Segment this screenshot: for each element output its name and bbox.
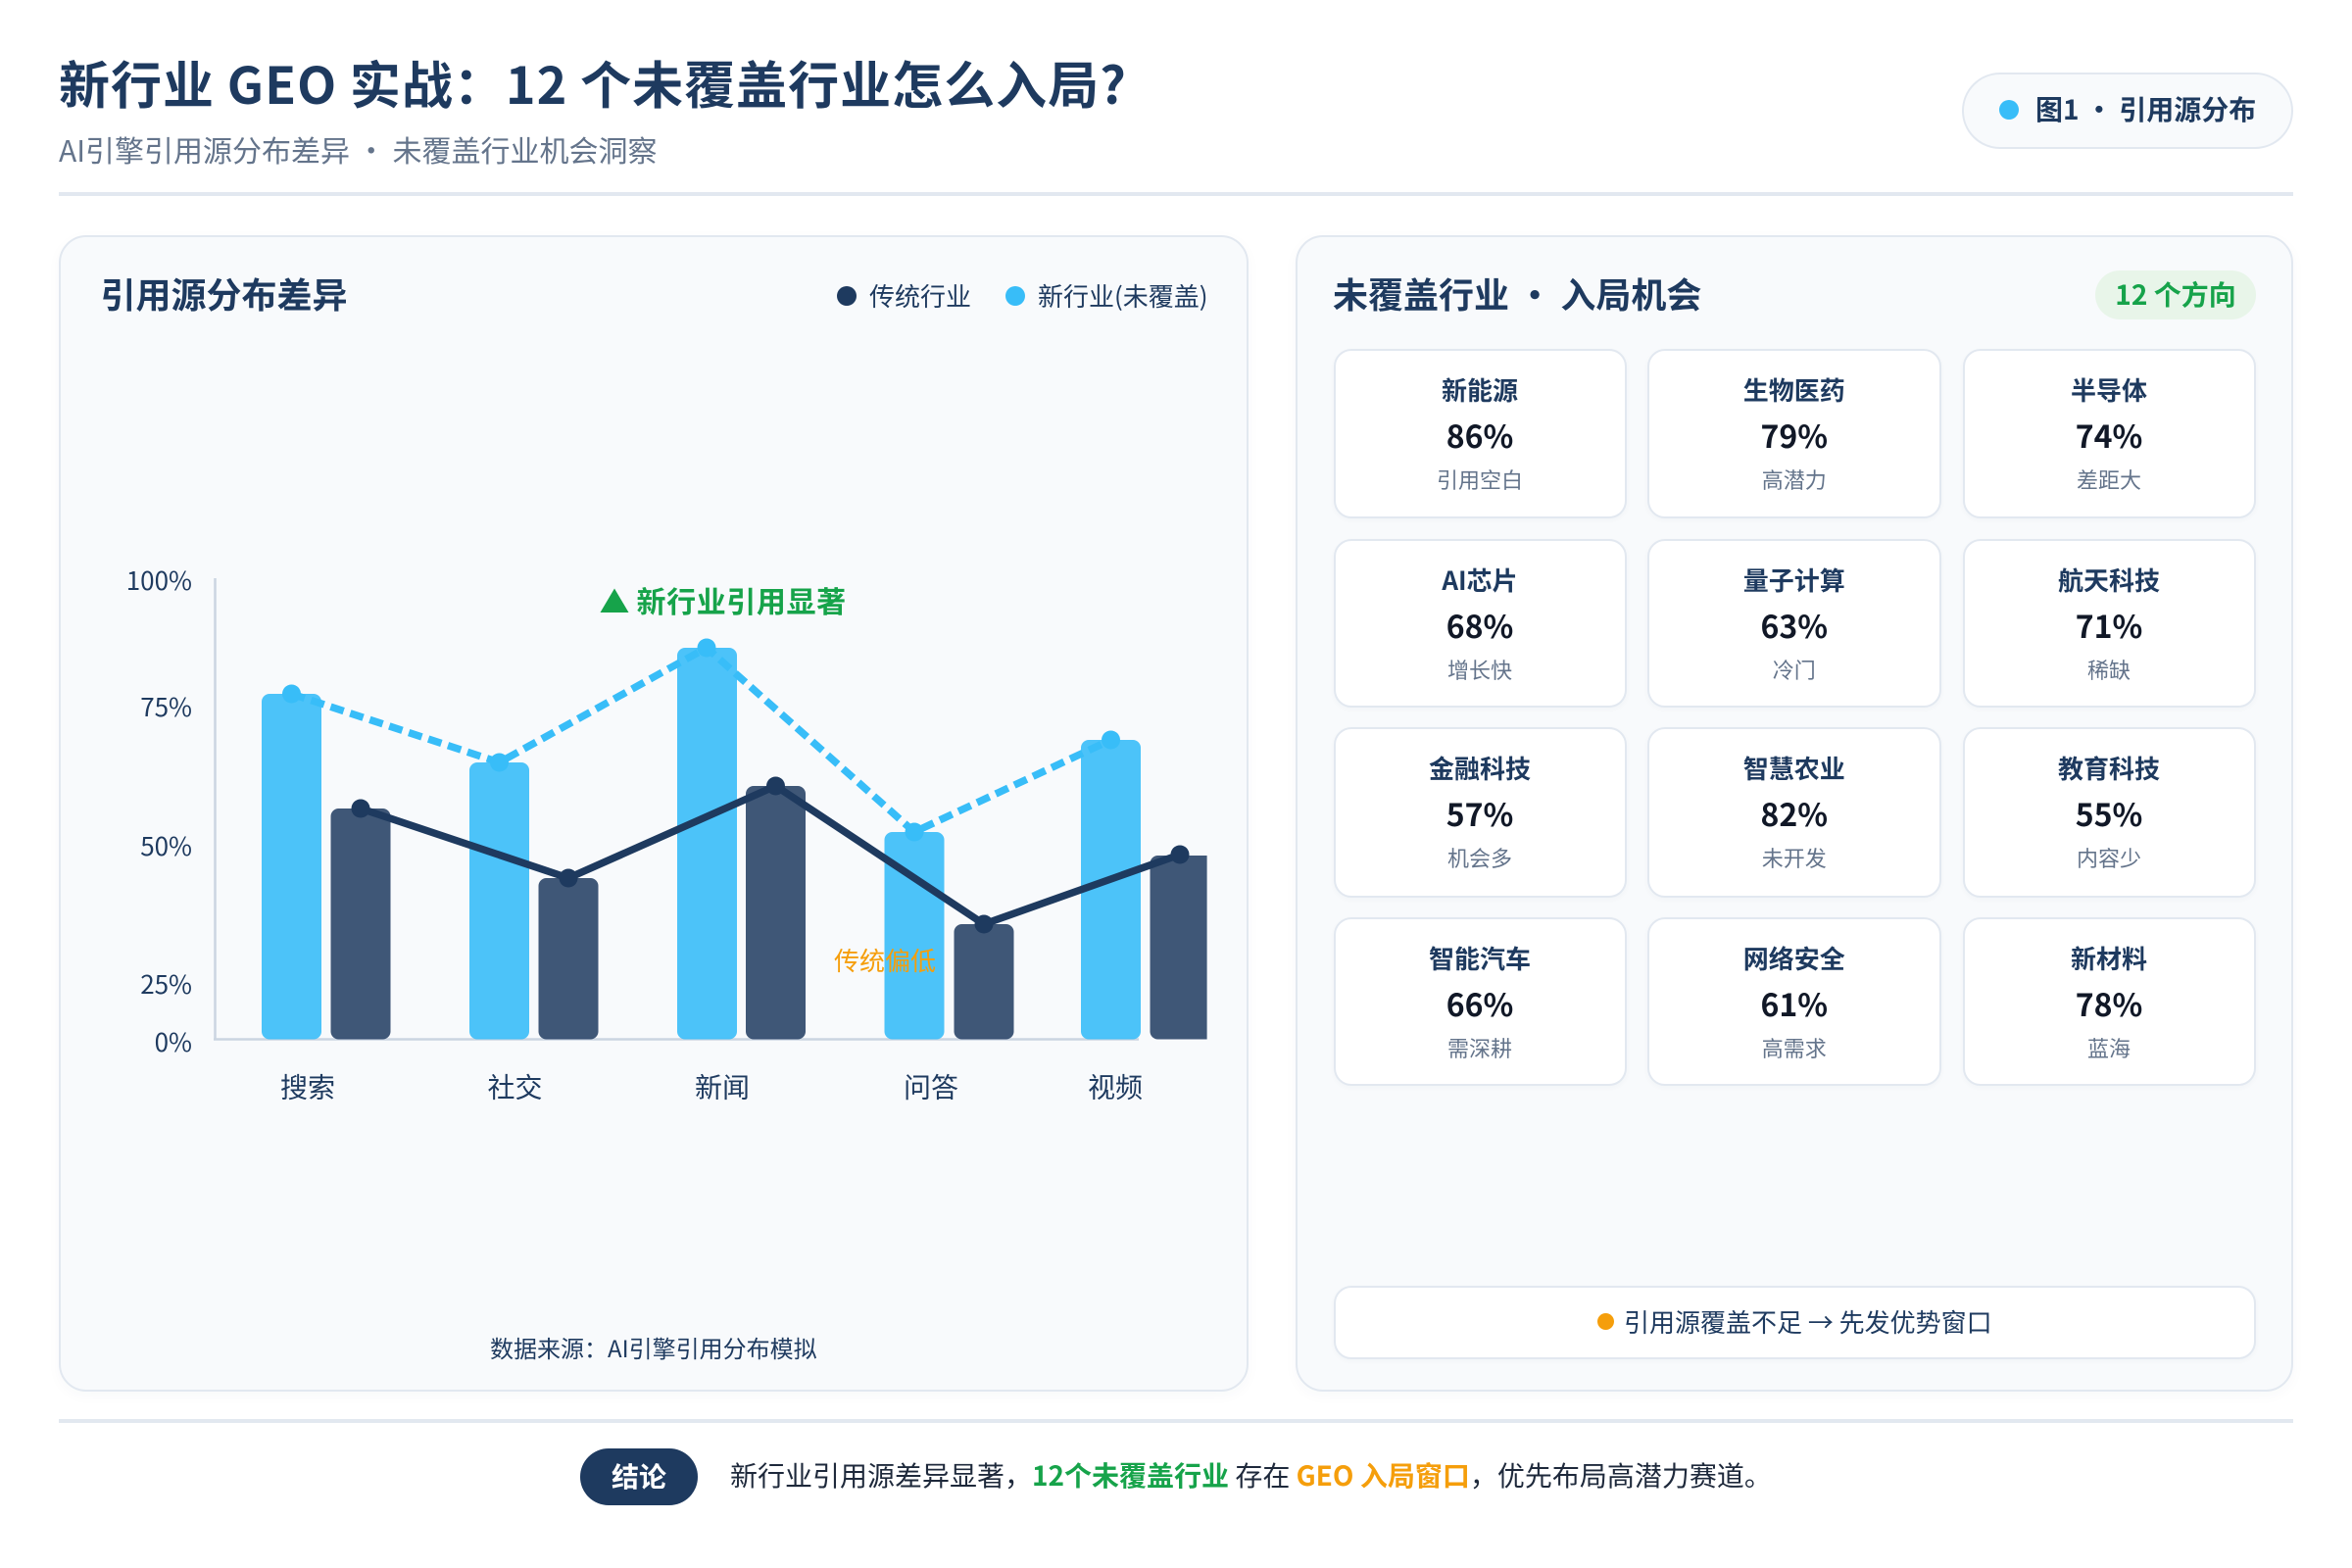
panel: citation distribution chart	[59, 235, 1249, 1392]
industry card: 教育科技	[1962, 727, 2256, 898]
y axis labels: 25%	[140, 965, 192, 1002]
count badge	[2095, 270, 2256, 319]
panel heading: 未覆盖行业 ・ 入局机会	[1333, 267, 1701, 318]
industry card: 新能源	[1333, 349, 1627, 518]
card value: 57%	[1446, 791, 1513, 836]
industry card: 量子计算	[1646, 539, 1941, 708]
card value: 78%	[2076, 981, 2142, 1026]
y axis labels: 100%	[126, 562, 192, 598]
industry card: 智能汽车	[1333, 917, 1627, 1086]
card value: 74%	[2076, 413, 2142, 458]
badge text: 图1 ・ 引用源分布	[2035, 88, 2256, 127]
card note: 引用空白	[1437, 464, 1523, 495]
subtitle: AI引擎引用源分布差异 ・ 未覆盖行业机会洞察	[59, 127, 657, 171]
card note: 高潜力	[1762, 464, 1827, 495]
card note: 机会多	[1447, 842, 1512, 873]
industry card: AI芯片	[1333, 539, 1627, 708]
x axis labels: 新闻	[695, 1066, 750, 1105]
icon: badge dot	[1999, 100, 2019, 120]
card note: 未开发	[1762, 842, 1827, 873]
bar and line chart	[128, 570, 1207, 1100]
y axis labels: 75%	[140, 688, 192, 724]
card name: 新能源	[1442, 371, 1518, 408]
card name: 网络安全	[1743, 940, 1845, 976]
card note: 蓝海	[2087, 1032, 2131, 1063]
industry card: 智慧农业	[1646, 727, 1941, 898]
industry card: 新材料	[1962, 917, 2256, 1086]
card value: 86%	[1446, 413, 1513, 458]
card note: 需深耕	[1447, 1032, 1512, 1063]
icon: orange dot	[1597, 1313, 1613, 1330]
card name: 航天科技	[2058, 562, 2160, 598]
card name: 生物医药	[1743, 371, 1845, 408]
annotation: traditional low: 传统偏低	[834, 942, 936, 978]
y axis labels: 50%	[140, 827, 192, 863]
conclusion tag text: 结论	[612, 1456, 666, 1495]
legend swatch	[1005, 286, 1025, 306]
figure badge	[1962, 73, 2293, 149]
card note: 冷门	[1773, 654, 1816, 685]
card name: 新材料	[2071, 940, 2147, 976]
count text: 12 个方向	[2115, 274, 2236, 314]
new industry bars	[262, 648, 1141, 1039]
card name: 量子计算	[1743, 562, 1845, 598]
card name: 教育科技	[2058, 750, 2160, 786]
card value: 66%	[1446, 981, 1513, 1026]
card value: 55%	[2076, 791, 2142, 836]
x axis labels: 搜索	[280, 1066, 335, 1105]
panel heading: 引用源分布差异	[100, 267, 348, 318]
panel: uncovered industries	[1296, 235, 2293, 1392]
card note: 差距大	[2077, 464, 2141, 495]
card name: 半导体	[2071, 371, 2147, 408]
industry card: 航天科技	[1962, 539, 2256, 708]
new industry dashed line	[282, 639, 1120, 841]
callout: coverage insight	[1333, 1286, 2256, 1358]
x axis labels: 社交	[487, 1066, 543, 1105]
industry card: 金融科技	[1333, 727, 1627, 898]
card value: 79%	[1760, 413, 1828, 458]
conclusion tag	[580, 1448, 698, 1505]
legend: traditional	[837, 277, 971, 314]
traditional solid line	[351, 776, 1190, 933]
card value: 61%	[1760, 981, 1828, 1026]
conclusion text: 新行业引用源差异显著，12个未覆盖行业 存在 GEO 入局窗口，优先布局高潜力赛道。	[730, 1455, 1772, 1494]
icon: up triangle	[600, 588, 629, 612]
card value: 71%	[2076, 603, 2142, 648]
industry card: 生物医药	[1646, 349, 1941, 518]
annotation: new industries notable: 新行业引用显著	[637, 578, 847, 621]
legend swatch	[837, 286, 857, 306]
industry card: 网络安全	[1646, 917, 1941, 1086]
legend label: 新行业(未覆盖)	[1038, 277, 1208, 314]
card value: 68%	[1446, 603, 1513, 648]
y axis labels: 0%	[155, 1023, 192, 1059]
card note: 高需求	[1762, 1032, 1827, 1063]
card value: 82%	[1760, 791, 1828, 836]
industry card: 半导体	[1962, 349, 2256, 518]
card note: 内容少	[2077, 842, 2141, 873]
legend label: 传统行业	[869, 277, 971, 314]
x axis labels: 问答	[904, 1066, 958, 1105]
card name: 金融科技	[1429, 750, 1531, 786]
legend: new industries	[1005, 277, 1208, 314]
y axis labels	[126, 562, 192, 1059]
card value: 63%	[1760, 603, 1828, 648]
title: 新行业 GEO 实战：12 个未覆盖行业怎么入局?	[59, 45, 1127, 119]
data source note: 数据来源：AI引擎引用分布模拟	[490, 1329, 817, 1364]
x axis labels	[280, 1066, 1143, 1105]
callout text: 引用源覆盖不足 → 先发优势窗口	[1624, 1303, 1992, 1340]
card note: 稀缺	[2087, 654, 2131, 685]
card note: 增长快	[1447, 654, 1512, 685]
card name: AI芯片	[1442, 562, 1518, 598]
card name: 智慧农业	[1743, 750, 1845, 786]
x axis labels: 视频	[1088, 1066, 1143, 1105]
card name: 智能汽车	[1429, 940, 1531, 976]
traditional industry bars	[331, 786, 1219, 1039]
